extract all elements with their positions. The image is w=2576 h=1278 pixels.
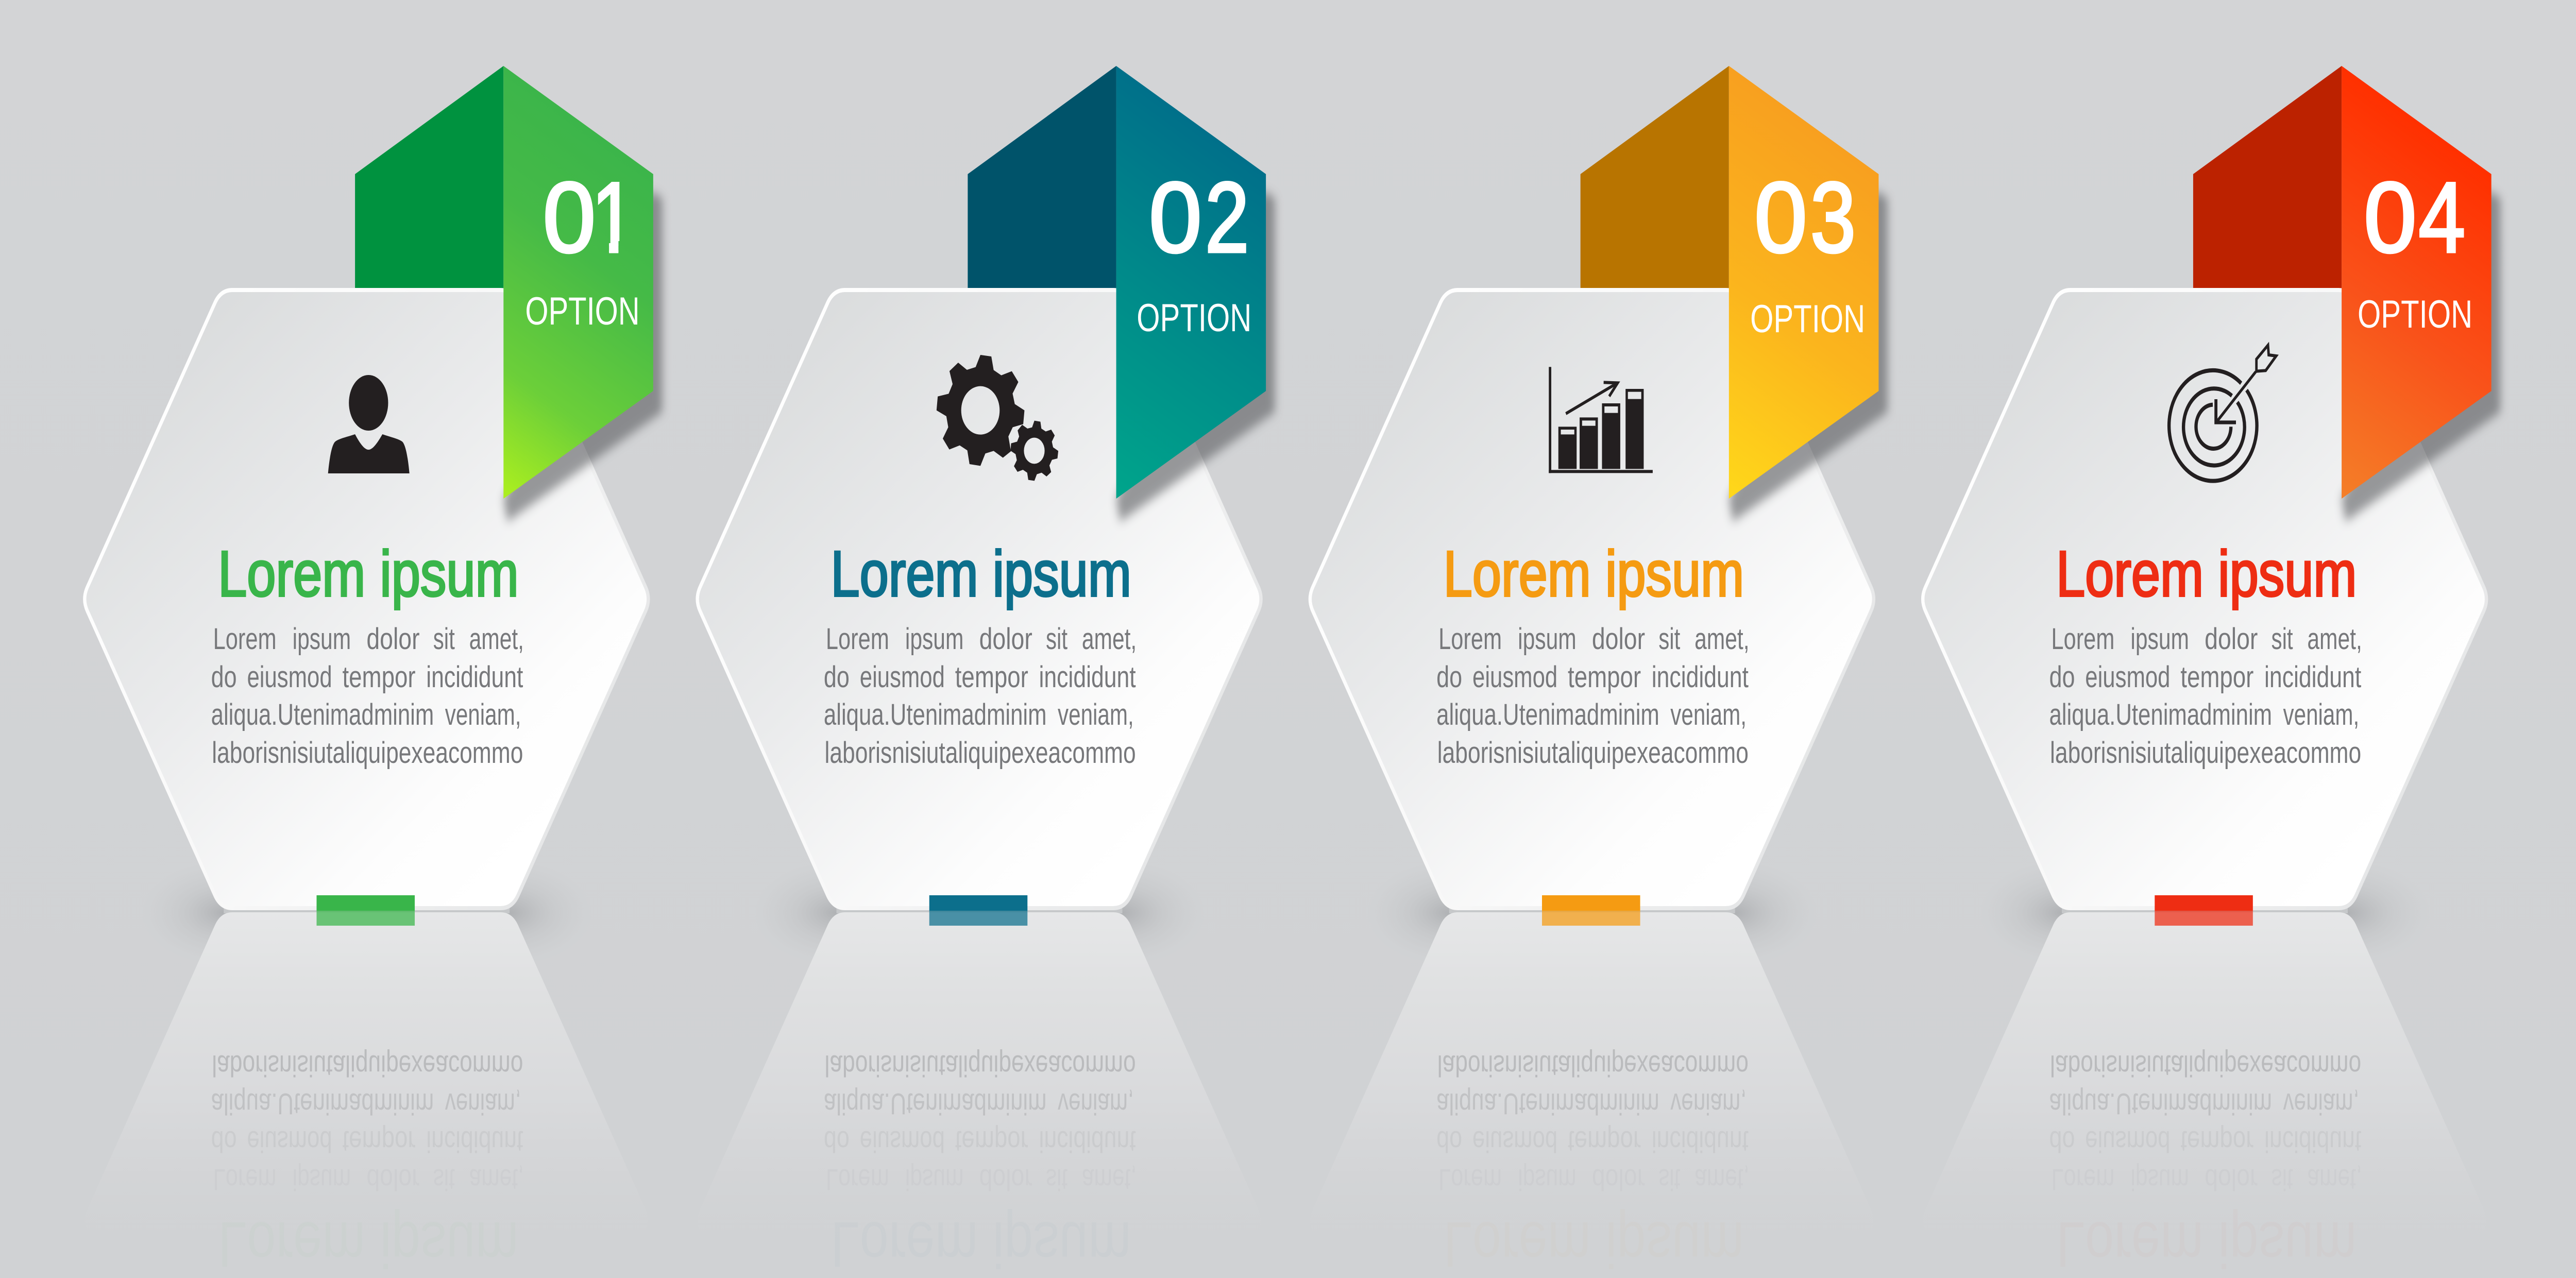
reflection: laborisnisiutaliquipexeacommo	[1437, 1049, 1749, 1082]
ribbon shadow	[503, 191, 662, 522]
body text: do	[2049, 661, 2075, 694]
bottom tab	[1542, 895, 1640, 926]
body text: ipsum	[1518, 623, 1577, 656]
title: Lorem ipsum	[1444, 538, 1744, 610]
body text: laborisnisiutaliquipexeacommo	[1437, 737, 1749, 770]
panel: option 03	[1310, 66, 1888, 1278]
panel: option 01	[83, 66, 667, 1116]
body text: sit	[433, 623, 455, 656]
reflection: ipsum	[905, 1163, 963, 1196]
reflection: sit	[2272, 1163, 2293, 1196]
reflection: amet,	[1694, 1163, 1750, 1196]
bottom tab	[316, 895, 415, 926]
body text: incididunt	[1652, 661, 1749, 694]
body text: incididunt	[426, 661, 523, 694]
number 04: 0	[2364, 162, 2417, 274]
reflection: aliqua.Utenimadminim	[824, 1087, 1047, 1120]
body text: veniam,	[1058, 698, 1134, 731]
panel: option 04	[1923, 66, 2500, 1278]
body text: dolor	[366, 623, 420, 656]
reflection: tempor	[1568, 1124, 1641, 1157]
body text: amet,	[1694, 623, 1750, 656]
body text: ipsum	[293, 623, 351, 656]
number 03: 0	[1754, 162, 1807, 274]
body text: aliqua.Utenimadminim	[824, 698, 1047, 731]
ribbon front	[2342, 66, 2492, 499]
reflection: ipsum	[1518, 1163, 1577, 1196]
body text: ipsum	[905, 623, 963, 656]
hexagon card	[698, 290, 1261, 908]
reflection: sit	[433, 1163, 455, 1196]
title: Lorem ipsum	[2056, 538, 2357, 610]
body text: tempor	[955, 661, 1028, 694]
number 01: 0	[543, 162, 596, 274]
number 03	[1754, 162, 1856, 274]
reflection: dolor	[2205, 1163, 2258, 1196]
bottom tab	[2155, 895, 2253, 926]
ribbon shadow	[1729, 191, 1888, 522]
body text: veniam,	[445, 698, 521, 731]
option label: OPTION	[525, 289, 640, 333]
body text: veniam,	[1670, 698, 1747, 731]
body text: Lorem	[826, 623, 889, 656]
body text	[824, 623, 1137, 770]
body text: tempor	[342, 661, 416, 694]
ribbon shadow	[2342, 191, 2500, 522]
body text: sit	[1046, 623, 1067, 656]
body text: incididunt	[1039, 661, 1136, 694]
body text: dolor	[1592, 623, 1645, 656]
body text: aliqua.Utenimadminim	[1436, 698, 1659, 731]
reflection: do	[2049, 1124, 2075, 1157]
ground shadow	[141, 861, 592, 964]
number 03: 3	[1810, 162, 1856, 274]
reflection: amet,	[2307, 1163, 2362, 1196]
reflection: aliqua.Utenimadminim	[1436, 1087, 1659, 1120]
body text	[1436, 623, 1750, 770]
body text: aliqua.Utenimadminim	[211, 698, 434, 731]
reflection: ipsum	[293, 1163, 351, 1196]
body text: laborisnisiutaliquipexeacommo	[825, 737, 1136, 770]
reflection	[1310, 912, 1874, 1278]
reflection: ipsum	[2130, 1163, 2189, 1196]
reflection: laborisnisiutaliquipexeacommo	[825, 1049, 1136, 1082]
number 02: 0	[1149, 162, 1202, 274]
bottom tab	[929, 895, 1027, 926]
number 01: 1	[591, 162, 636, 274]
ground shadow	[754, 861, 1205, 964]
body text: do	[824, 661, 850, 694]
body text: Lorem	[1438, 623, 1502, 656]
reflection: dolor	[979, 1163, 1032, 1196]
dark ribbon back	[2193, 66, 2342, 292]
reflection: tempor	[955, 1124, 1028, 1157]
reflection	[84, 912, 648, 1278]
reflection: veniam,	[445, 1087, 521, 1120]
body text: eiusmod	[247, 661, 332, 694]
reflection: sit	[1046, 1163, 1067, 1196]
body text	[211, 623, 524, 770]
body text: amet,	[1082, 623, 1137, 656]
reflection: amet,	[1082, 1163, 1137, 1196]
hexagon card	[1923, 290, 2486, 908]
hexagon card	[84, 290, 648, 908]
body text: eiusmod	[2085, 661, 2170, 694]
reflection: Lorem	[213, 1163, 277, 1196]
icon: gears	[937, 355, 1058, 481]
body text: do	[1436, 661, 1462, 694]
body text: laborisnisiutaliquipexeacommo	[212, 737, 523, 770]
reflection: eiusmod	[2085, 1124, 2170, 1157]
reflection: dolor	[1592, 1163, 1645, 1196]
reflection	[1923, 912, 2486, 1278]
reflection: aliqua.Utenimadminim	[2049, 1087, 2272, 1120]
reflection: do	[824, 1124, 850, 1157]
title: Lorem ipsum	[831, 538, 1131, 610]
reflection: sit	[1658, 1163, 1681, 1196]
dark ribbon back	[1581, 66, 1729, 292]
hexagon card	[1310, 290, 1874, 908]
panel: option 02	[698, 66, 1275, 1278]
number 04: 4	[2418, 162, 2465, 273]
reflection	[698, 912, 1261, 1278]
reflection: Lorem	[1438, 1163, 1502, 1196]
reflection: incididunt	[1652, 1124, 1749, 1157]
reflection: eiusmod	[860, 1124, 945, 1157]
ground shadow	[1366, 861, 1818, 964]
reflection: do	[211, 1124, 237, 1157]
body text: incididunt	[2264, 661, 2362, 694]
reflection: Lorem	[826, 1163, 889, 1196]
ground shadow	[1979, 861, 2430, 964]
ribbon front	[1116, 66, 1266, 499]
body text: tempor	[2180, 661, 2253, 694]
icon: target with arrow	[2169, 345, 2276, 481]
reflection: tempor	[2180, 1124, 2253, 1157]
body text: amet,	[469, 623, 524, 656]
reflection: dolor	[366, 1163, 420, 1196]
body text: ipsum	[2130, 623, 2189, 656]
body text: veniam,	[2283, 698, 2359, 731]
number 04	[2364, 162, 2465, 274]
body text: aliqua.Utenimadminim	[2049, 698, 2272, 731]
reflection: veniam,	[1670, 1087, 1747, 1120]
reflection: Lorem	[2051, 1163, 2114, 1196]
reflection: veniam,	[2283, 1087, 2359, 1120]
reflection: do	[1436, 1124, 1462, 1157]
reflection: incididunt	[2264, 1124, 2362, 1157]
dark ribbon back	[355, 66, 503, 292]
body text: eiusmod	[860, 661, 945, 694]
reflection: laborisnisiutaliquipexeacommo	[212, 1049, 523, 1082]
body text: eiusmod	[1472, 661, 1557, 694]
reflection: eiusmod	[1472, 1124, 1557, 1157]
icon: bar chart with arrow	[1549, 367, 1653, 473]
reflection: tempor	[342, 1124, 416, 1157]
reflection: veniam,	[1058, 1087, 1134, 1120]
number 01	[545, 181, 619, 254]
dark ribbon back	[968, 66, 1116, 292]
body text	[2049, 623, 2362, 770]
ribbon shadow	[1116, 191, 1275, 522]
body text: dolor	[979, 623, 1032, 656]
icon: person	[328, 375, 410, 473]
body text: Lorem	[213, 623, 277, 656]
number 02: 2	[1205, 162, 1249, 274]
reflection: incididunt	[426, 1124, 523, 1157]
ribbon front	[503, 66, 653, 499]
body text: laborisnisiutaliquipexeacommo	[2050, 737, 2361, 770]
ribbon front	[1729, 66, 1878, 499]
option label: OPTION	[1137, 296, 1251, 340]
body text: amet,	[2307, 623, 2362, 656]
number 02	[1149, 162, 1249, 274]
body text: sit	[2272, 623, 2293, 656]
reflection: eiusmod	[247, 1124, 332, 1157]
reflection: amet,	[469, 1163, 524, 1196]
reflection: incididunt	[1039, 1124, 1136, 1157]
body text: tempor	[1568, 661, 1641, 694]
body text: dolor	[2205, 623, 2258, 656]
body text: sit	[1658, 623, 1681, 656]
body text: Lorem	[2051, 623, 2114, 656]
reflection: laborisnisiutaliquipexeacommo	[2050, 1049, 2361, 1082]
option label: OPTION	[2358, 292, 2472, 336]
reflection: aliqua.Utenimadminim	[211, 1087, 434, 1120]
option label: OPTION	[1750, 297, 1865, 341]
title: Lorem ipsum	[218, 538, 519, 610]
body text: do	[211, 661, 237, 694]
